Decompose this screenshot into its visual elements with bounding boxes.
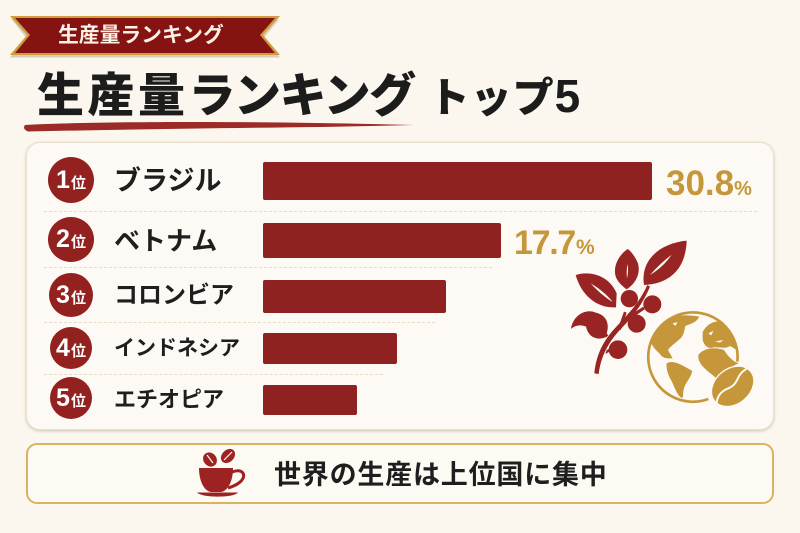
callout text: 世界の生産は上位国に集中 (274, 460, 608, 490)
panel: conclusion callout (26, 443, 774, 504)
row 2 name: ベトナム (114, 226, 217, 256)
row 4 bar (263, 333, 397, 364)
title: 生産量ランキング トップ5 (37, 69, 580, 122)
row 1 rank: 1位 (56, 166, 86, 194)
ribbon banner: 生産量ランキング (58, 24, 224, 47)
ribbon banner (10, 16, 280, 58)
row 1 name: ブラジル (114, 166, 221, 196)
row 1 rank (48, 157, 94, 203)
row 4 rank (50, 327, 92, 369)
row 5 bar (263, 385, 357, 415)
row 3 bar (263, 280, 446, 313)
row 3 name: コロンビア (114, 282, 234, 309)
row 4 name: インドネシア (114, 337, 240, 360)
row 1 value: 30.8% (666, 164, 752, 203)
icon: coffee branch (571, 241, 687, 374)
row 3 rank: 3位 (56, 281, 86, 309)
row 4 rank: 4位 (56, 334, 86, 362)
row 2 bar (263, 223, 501, 258)
row 2 rank: 2位 (56, 225, 86, 253)
row 1 bar (263, 162, 652, 200)
icon: coffee cup (197, 448, 246, 497)
row 5 rank (50, 377, 92, 419)
row 5 name: エチオピア (114, 387, 224, 412)
row 2 rank (48, 217, 94, 262)
illustration: coffee branch and globe (571, 240, 754, 406)
title underline brush (24, 122, 413, 132)
row 2 value: 17.7% (514, 224, 595, 262)
panel: ranking chart (26, 142, 774, 430)
icon: globe with coffee bean (648, 312, 762, 415)
row 5 rank: 5位 (56, 384, 86, 412)
row 3 rank (49, 273, 93, 317)
